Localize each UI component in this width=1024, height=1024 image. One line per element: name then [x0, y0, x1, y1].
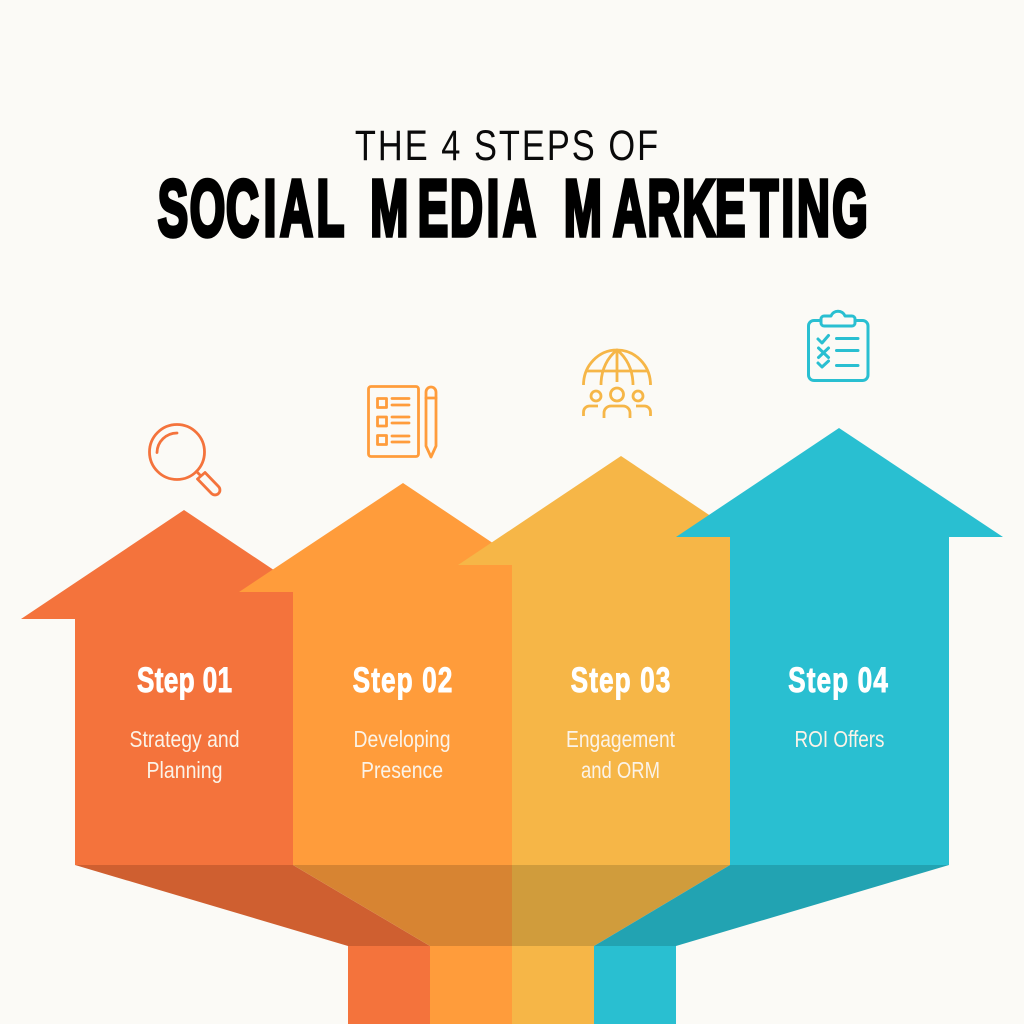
arrow: step 02 [239, 483, 566, 865]
title [158, 122, 868, 253]
icon: checklist and pencil [368, 386, 436, 457]
title line: social media marketing: MARKETING [564, 163, 868, 253]
title line: social media marketing [158, 163, 868, 253]
title line: social media marketing: SOCIAL [158, 163, 344, 253]
title line: social media marketing: MEDIA [370, 163, 536, 253]
step 04 text [788, 660, 889, 752]
step 02 text: Developing [354, 726, 450, 752]
arrow: step 04 [676, 428, 1003, 865]
step 02 text: Step 02 [353, 660, 452, 700]
icon: globe and people [584, 350, 650, 418]
step 03 text: Step 03 [571, 660, 670, 700]
step 03 text: and ORM [581, 757, 660, 783]
step 04 text: ROI Offers [794, 726, 884, 752]
icon: clipboard checklist [808, 311, 868, 380]
arrow: step 01 [21, 510, 347, 865]
step 02 text [353, 660, 452, 783]
step 03 text: Engagement [566, 726, 676, 752]
step 03 text [566, 660, 676, 783]
step 04 text: Step 04 [788, 660, 889, 700]
title line: the 4 steps of: THE 4 STEPS OF [355, 122, 658, 170]
step 01 text: Strategy and [130, 726, 240, 752]
step 01 text: Step 01 [137, 660, 232, 700]
step 02 text: Presence [361, 757, 443, 783]
step 01 text [130, 660, 240, 783]
funnel shadow bands [75, 865, 949, 946]
icon: magnifying glass [150, 424, 220, 495]
arrow: step 03 [458, 456, 784, 865]
stem stripes [348, 946, 676, 1024]
step 01 text: Planning [146, 757, 222, 783]
